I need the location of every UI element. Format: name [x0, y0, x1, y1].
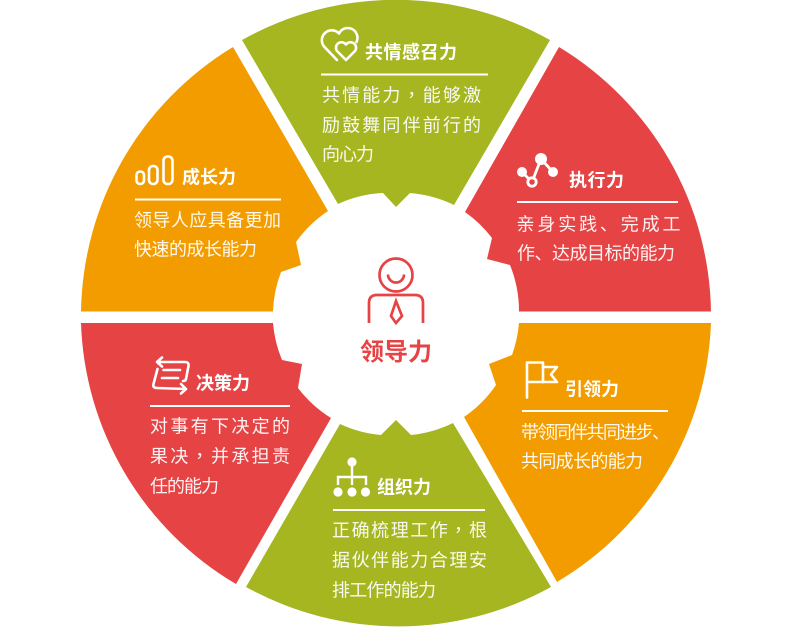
text: execution description: 作、达成目标的能力 [517, 244, 675, 264]
text: leading description: 共同成长的能力 [521, 452, 643, 472]
panel: growth (upper left) [81, 47, 328, 312]
text: leading description [521, 422, 670, 472]
text: organization description: 排工作的能力 [332, 580, 436, 600]
wedge: lower right orange [464, 323, 711, 582]
text: decision description: 果决，并承担责 [150, 442, 290, 468]
text: empathy description [322, 82, 481, 164]
text: empathy description: 励鼓舞同伴前行的 [322, 116, 481, 136]
heading: decision: 决策力 [196, 374, 250, 394]
icon: org chart [333, 457, 370, 497]
text: decision description [150, 416, 290, 496]
text: empathy description: 向心力 [322, 144, 374, 164]
text: leading description: 带领同伴共同进步、 [521, 422, 670, 442]
text: decision description: 任的能力 [150, 476, 219, 496]
text: execution description [516, 214, 680, 264]
heading: growth: 成长力 [182, 166, 236, 188]
heading: organization: 组织力 [377, 478, 431, 498]
text: growth description [134, 210, 281, 260]
heading: leading: 引领力 [565, 380, 619, 400]
icon: bars [136, 156, 172, 184]
icon: flag [527, 362, 557, 398]
heading: execution: 执行力 [569, 170, 624, 190]
center: leadership hub [360, 258, 432, 366]
wedge: upper left orange [81, 47, 328, 312]
wedge: bottom green [246, 420, 551, 626]
wedge: top green [242, 0, 550, 207]
heading: leadership: 领导力 [360, 339, 432, 366]
icon: decision arrows [153, 358, 189, 394]
text: organization description: 正确梳理工作，根 [332, 516, 487, 542]
panel: organization (bottom) [246, 420, 551, 626]
icon: connected nodes [517, 153, 558, 186]
panel: decision (lower left) [81, 323, 331, 584]
icon: leader figure [369, 258, 423, 323]
wedge: lower left red [81, 323, 331, 584]
panel: empathy appeal (top) [242, 0, 550, 207]
panel: execution (upper right) [465, 47, 711, 312]
text: growth description: 领导人应具备更加 [134, 210, 281, 230]
heading: empathy: 共情感召力 [365, 42, 457, 62]
text: growth description: 快速的成长能力 [134, 240, 257, 260]
icon: hearts [322, 28, 357, 60]
text: organization description: 据伙伴能力合理安 [332, 550, 487, 570]
text: decision description: 对事有下决定的 [150, 416, 290, 436]
text: organization description [332, 516, 487, 600]
panel: leading (lower right) [464, 323, 711, 582]
text: empathy description: 共情能力，能够激 [322, 82, 481, 108]
wedge: upper right red [465, 47, 711, 312]
text: execution description: 亲身实践、完成工 [516, 214, 680, 234]
